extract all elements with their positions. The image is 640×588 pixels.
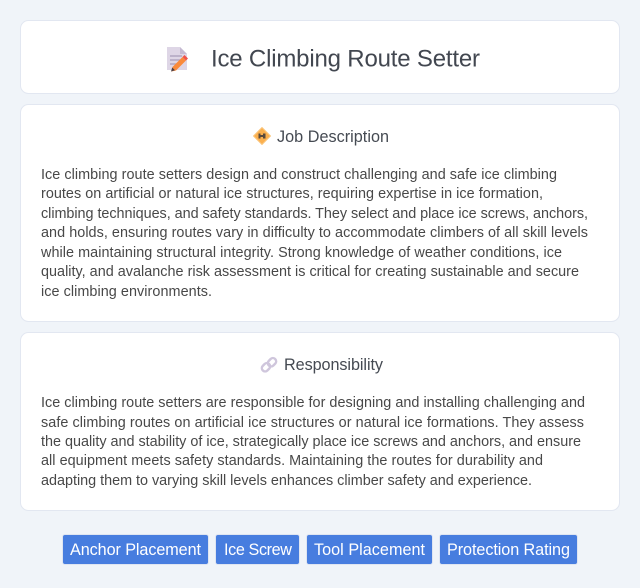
- tag: protection rating: Protection Rating: [447, 541, 570, 559]
- icon: road sign diamond: [254, 128, 270, 144]
- panel: job description: [20, 104, 620, 322]
- text block: responsibility: all equipment meets safety standards. Maintaining the routes for durability and: [41, 453, 543, 469]
- tags row: [62, 534, 578, 564]
- tag: ice screw: Ice Screw: [224, 541, 292, 559]
- text block: responsibility: [41, 395, 585, 489]
- text block: job description: [40, 167, 588, 300]
- icon: chain link: [261, 357, 277, 373]
- text block: responsibility: Ice climbing route setters are responsible for designing and installing challenging and: [41, 395, 585, 411]
- text block: responsibility: adapting them to varying skill levels enhances climber safety and experience.: [41, 473, 532, 489]
- tag: anchor placement: Anchor Placement: [70, 541, 202, 559]
- tag: tool placement: [306, 534, 432, 564]
- text block: job description: quality, and avalanche risk assessment is critical for creating sustainable and secure: [41, 264, 579, 280]
- tag: protection rating: [440, 534, 578, 564]
- panel: title: [20, 20, 620, 94]
- tag: anchor placement: [62, 534, 208, 564]
- tag: tool placement: Tool Placement: [314, 541, 426, 559]
- text block: job description: and holds, ensuring routes vary in difficulty to accommodate climbers of all skill levels: [41, 225, 588, 241]
- heading: main title: Ice Climbing Route Setter: [211, 46, 480, 72]
- tag: ice screw: [216, 534, 300, 564]
- icon: document with pencil: [167, 47, 188, 72]
- text block: responsibility: the quality and stability of ice, strategically place ice screws and anchors, and ensure: [41, 434, 581, 450]
- text block: job description: while maintaining structural integrity. Strong knowledge of weather conditions, ice: [40, 245, 562, 261]
- text block: job description: ice climbing environments.: [41, 284, 212, 300]
- text block: job description: routes on artificial or natural ice structures, requiring expertise in ice formation,: [41, 186, 543, 202]
- heading: job description: Job Description: [277, 128, 389, 146]
- text block: job description: Ice climbing route setters design and construct challenging and safe ice climbing: [41, 167, 557, 183]
- heading: responsibility: Responsibility: [284, 356, 384, 374]
- text block: job description: climbing techniques, and safety standards. They select and place ice screws, anchors,: [41, 206, 588, 222]
- text block: responsibility: safe climbing routes on artificial ice structures or natural ice formations. They assess: [41, 415, 584, 431]
- panel: responsibility: [20, 332, 620, 510]
